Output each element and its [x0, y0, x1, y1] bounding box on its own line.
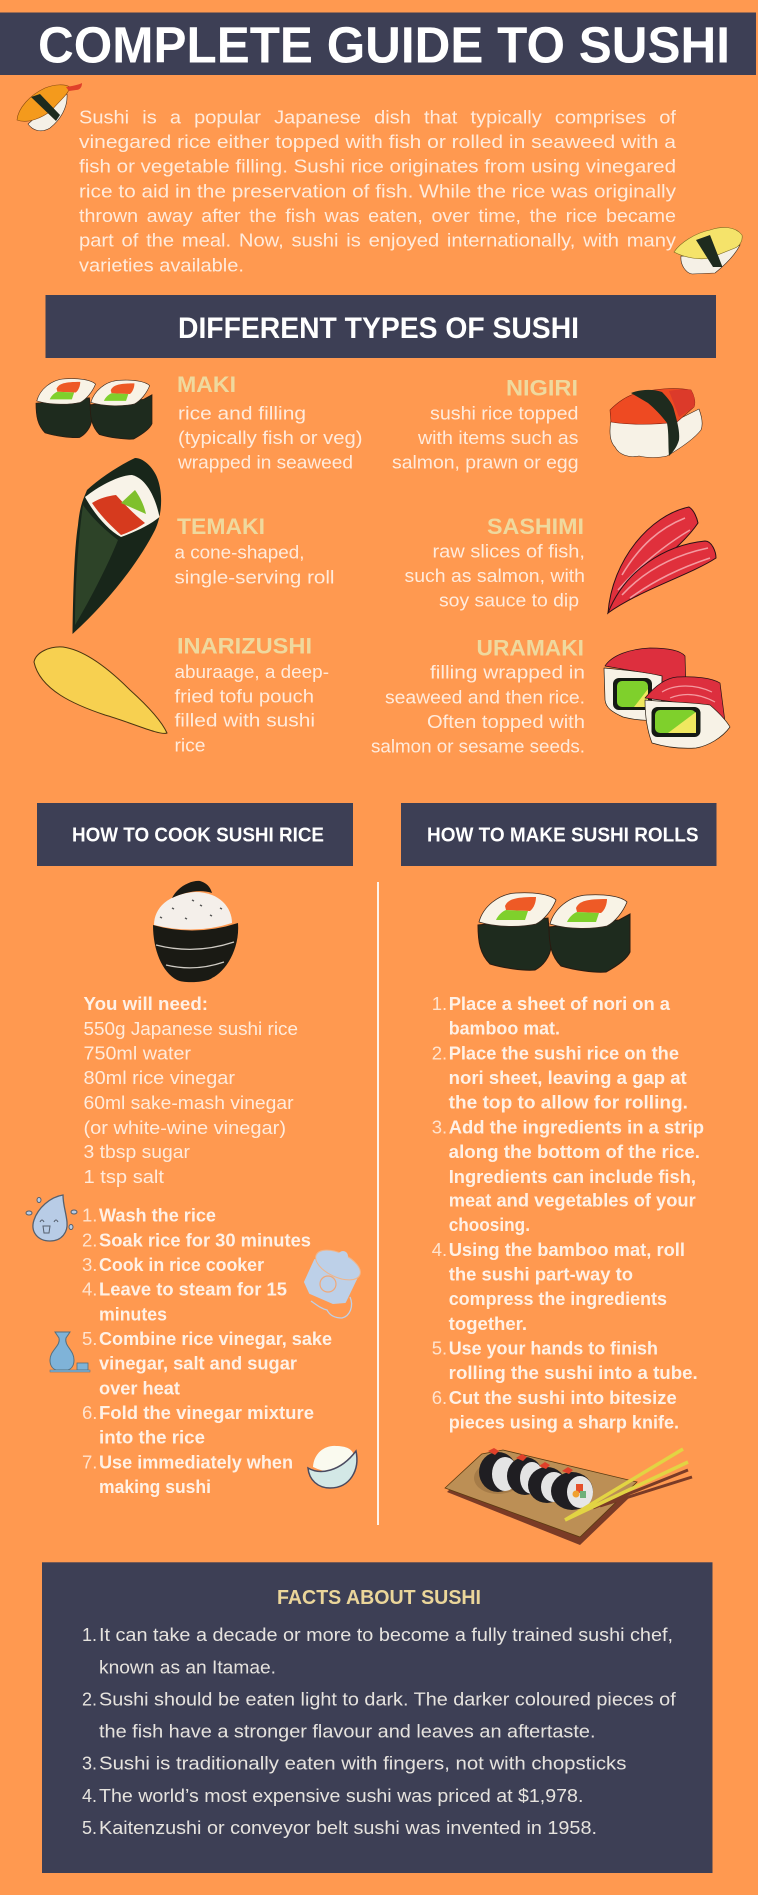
facts list: Sushi should be eaten light to dark. The darker coloured pieces of — [99, 1689, 677, 1709]
cooking steps: 1. — [82, 1205, 97, 1226]
cooking steps — [82, 1205, 332, 1497]
type: inarizushi: aburaage, a deep- — [174, 661, 329, 682]
type: inarizushi: INARIZUSHI — [177, 633, 312, 658]
icon: egg nigiri — [674, 227, 742, 274]
roll-making steps: Place a sheet of nori on a — [449, 993, 671, 1014]
type: nigiri: with items such as — [417, 427, 578, 448]
cooking steps: 4. — [82, 1279, 97, 1300]
type: temaki: single-serving roll — [174, 566, 334, 587]
icon: temaki — [72, 458, 161, 634]
ingredients list — [84, 993, 298, 1187]
ingredients list: 60ml sake-mash vinegar — [84, 1092, 294, 1113]
cooking steps: Leave to steam for 15 — [99, 1279, 287, 1300]
intro paragraph: rice to aid in the preservation of fish. While the rice was originally — [79, 180, 677, 201]
intro paragraph: Sushi is a popular Japanese dish that typically comprises of — [79, 106, 677, 127]
facts list: Sushi is traditionally eaten with fingers, not with chopsticks — [99, 1753, 626, 1773]
cooking steps: Fold the vinegar mixture — [99, 1402, 314, 1423]
icon: sushi board with chopsticks — [445, 1448, 692, 1545]
cooking steps: 7. — [82, 1451, 97, 1472]
type: temaki: TEMAKI — [177, 514, 265, 539]
facts list: known as an Itamae. — [99, 1657, 276, 1677]
roll-making steps: Place the sushi rice on the — [449, 1042, 679, 1063]
section heading: make rolls: HOW TO MAKE SUSHI ROLLS — [427, 825, 698, 847]
cooking steps: 2. — [82, 1229, 97, 1250]
roll-making steps: rolling the sushi into a tube. — [449, 1362, 698, 1383]
type: inarizushi — [174, 633, 329, 755]
cooking steps: 6. — [82, 1402, 97, 1423]
roll-making steps: the top to allow for rolling. — [449, 1092, 688, 1113]
roll-making steps: Ingredients can include fish, — [449, 1166, 696, 1187]
cooking steps: vinegar, salt and sugar — [99, 1353, 297, 1374]
intro paragraph — [79, 106, 677, 275]
ingredients list: 750ml water — [84, 1043, 191, 1064]
roll-making steps: Cut the sushi into bitesize — [449, 1387, 677, 1408]
facts list: It can take a decade or more to become a fully trained sushi chef, — [99, 1625, 673, 1645]
cooking steps: minutes — [99, 1303, 167, 1324]
type: uramaki: filling wrapped in — [430, 662, 585, 683]
cooking steps: 3. — [82, 1254, 97, 1275]
roll-making steps: Using the bamboo mat, roll — [449, 1239, 685, 1260]
icon: sashimi — [608, 507, 716, 613]
intro paragraph: fish or vegetable filling. Sushi rice originates from using vinegared — [79, 156, 676, 177]
facts list: 2. — [82, 1689, 97, 1709]
type: sashimi — [404, 514, 585, 611]
roll-making steps: the sushi part-way to — [449, 1264, 633, 1285]
icon: water drop — [26, 1195, 77, 1241]
type: temaki: a cone-shaped, — [174, 542, 304, 563]
section heading: make rolls — [401, 803, 716, 866]
roll-making steps: 1. — [432, 993, 447, 1014]
type: nigiri: salmon, prawn or egg — [392, 452, 578, 473]
roll-making steps: 3. — [432, 1116, 447, 1137]
facts list: the fish have a stronger flavour and leaves an aftertaste. — [99, 1721, 596, 1741]
type: inarizushi: rice — [174, 734, 206, 755]
cooking steps: Combine rice vinegar, sake — [99, 1328, 332, 1349]
icon: rice cooker — [305, 1244, 365, 1318]
facts list: 5. — [82, 1818, 97, 1838]
icon: sake flask and cup — [50, 1332, 90, 1372]
icon: maki (large) — [478, 893, 630, 972]
roll-making steps — [432, 993, 704, 1433]
intro paragraph: vinegared rice either topped with fish or rolled in seaweed with a — [79, 131, 677, 152]
roll-making steps: Use your hands to finish — [449, 1338, 658, 1359]
section heading: cook rice — [37, 803, 353, 866]
type: nigiri — [392, 375, 578, 473]
ingredients list: 80ml rice vinegar — [84, 1067, 235, 1088]
facts list: The world’s most expensive sushi was priced at $1,978. — [99, 1786, 583, 1806]
type: nigiri: sushi rice topped — [430, 402, 578, 423]
type: uramaki: Often topped with — [427, 711, 585, 732]
cooking steps: over heat — [99, 1377, 180, 1398]
ingredients list: 550g Japanese sushi rice — [84, 1018, 298, 1039]
roll-making steps: 2. — [432, 1042, 447, 1063]
section heading: different types — [46, 295, 716, 358]
roll-making steps: meat and vegetables of your — [449, 1190, 696, 1211]
icon: bowl of rice — [308, 1446, 357, 1488]
ingredients list: 1 tsp salt — [84, 1166, 164, 1187]
icon: maki (small) — [36, 379, 152, 439]
cooking steps: 5. — [82, 1328, 97, 1349]
cooking steps: Cook in rice cooker — [99, 1254, 264, 1275]
icon: inarizushi — [34, 647, 167, 733]
roll-making steps: Add the ingredients in a strip — [449, 1116, 704, 1137]
type: temaki — [174, 514, 334, 587]
ingredients list: You will need: — [84, 993, 208, 1014]
facts list: 1. — [82, 1625, 97, 1645]
cooking steps: Soak rice for 30 minutes — [99, 1229, 311, 1250]
icon: nigiri — [610, 389, 702, 458]
type: sashimi: soy sauce to dip — [439, 590, 579, 611]
type: inarizushi: fried tofu pouch — [174, 686, 314, 707]
type: uramaki: URAMAKI — [476, 635, 584, 660]
facts list — [82, 1625, 677, 1838]
icon: uramaki — [604, 648, 730, 748]
cooking steps: making sushi — [99, 1476, 211, 1497]
ingredients list: (or white-wine vinegar) — [84, 1117, 286, 1138]
roll-making steps: together. — [449, 1313, 527, 1334]
facts heading: FACTS ABOUT SUSHI — [277, 1587, 481, 1609]
type: sashimi: raw slices of fish, — [432, 540, 585, 561]
facts list: 4. — [82, 1786, 97, 1806]
type: inarizushi: filled with sushi — [174, 710, 315, 731]
type: maki — [177, 372, 362, 473]
type: sashimi: SASHIMI — [487, 514, 584, 539]
roll-making steps: along the bottom of the rice. — [449, 1141, 700, 1162]
roll-making steps: 5. — [432, 1338, 447, 1359]
intro paragraph: thrown away after the fish was eaten, over time, the rice became — [79, 205, 676, 226]
intro paragraph: part of the meal. Now, sushi is enjoyed internationally, with many — [79, 230, 677, 251]
roll-making steps: compress the ingredients — [449, 1288, 667, 1309]
intro paragraph: varieties available. — [79, 254, 244, 275]
type: maki: rice and filling — [178, 402, 306, 423]
type: uramaki: seaweed and then rice. — [385, 686, 585, 707]
cooking steps: Use immediately when — [99, 1451, 293, 1472]
title: COMPLETE GUIDE TO SUSHI — [38, 16, 730, 74]
roll-making steps: 6. — [432, 1387, 447, 1408]
type: uramaki — [371, 635, 585, 757]
cooking steps: into the rice — [99, 1427, 205, 1448]
panel: facts about sushi — [42, 1562, 712, 1873]
title banner — [0, 12, 756, 75]
roll-making steps: pieces using a sharp knife. — [449, 1412, 679, 1433]
roll-making steps: nori sheet, leaving a gap at — [449, 1067, 687, 1088]
icon: prawn nigiri — [17, 83, 82, 131]
cooking steps: Wash the rice — [99, 1205, 216, 1226]
roll-making steps: 4. — [432, 1239, 447, 1260]
roll-making steps: bamboo mat. — [449, 1018, 560, 1039]
type: sashimi: such as salmon, with — [404, 565, 585, 586]
roll-making steps: choosing. — [449, 1214, 530, 1235]
type: maki: (typically fish or veg) — [178, 427, 362, 448]
type: maki: MAKI — [177, 372, 236, 397]
facts list: Kaitenzushi or conveyor belt sushi was invented in 1958. — [99, 1818, 597, 1838]
section heading: cook rice: HOW TO COOK SUSHI RICE — [72, 825, 324, 847]
icon: rice bowl — [153, 881, 238, 982]
type: nigiri: NIGIRI — [506, 375, 578, 400]
facts list: 3. — [82, 1753, 97, 1773]
section heading: different types: DIFFERENT TYPES OF SUSHI — [178, 312, 579, 345]
ingredients list: 3 tbsp sugar — [84, 1141, 190, 1162]
type: maki: wrapped in seaweed — [177, 452, 353, 473]
type: uramaki: salmon or sesame seeds. — [371, 736, 585, 757]
